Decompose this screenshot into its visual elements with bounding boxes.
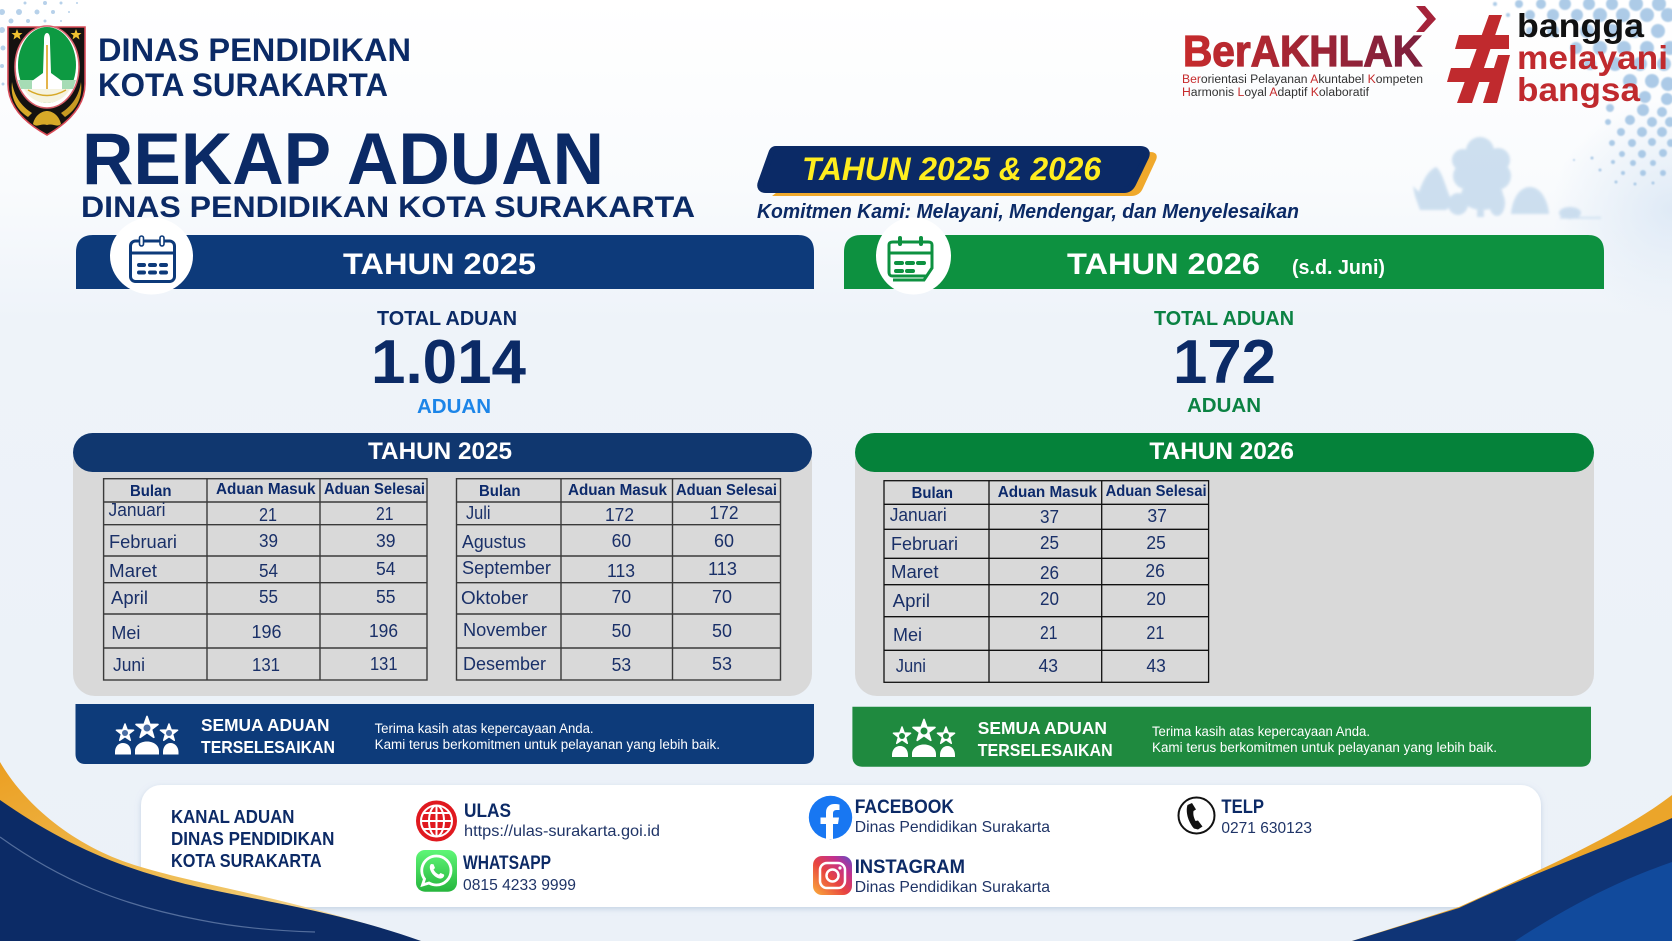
table: januari sampai juni 2025: Februari bbox=[109, 532, 177, 552]
banner: semua aduan terselesaikan 2026: Kami terus berkomitmen untuk pelayanan yang lebih baik. bbox=[1152, 740, 1497, 755]
channel: facebook: FACEBOOK bbox=[855, 797, 954, 818]
table: juli sampai desember 2025: 60 bbox=[714, 531, 734, 551]
table: juli sampai desember 2025: Desember bbox=[463, 654, 546, 674]
icon: people with stars green bbox=[892, 720, 955, 757]
heading: kanal aduan: KANAL ADUAN bbox=[171, 807, 294, 827]
table: januari sampai juni 2025: 55 bbox=[376, 587, 396, 607]
table: juli sampai desember 2025: 50 bbox=[612, 621, 631, 641]
table: juli sampai desember 2025: November bbox=[463, 620, 547, 640]
table: juli sampai desember 2025: Aduan Selesai bbox=[676, 482, 777, 499]
table: juli sampai desember 2025: 70 bbox=[712, 587, 732, 607]
table: januari sampai juni 2026: Aduan Selesai bbox=[1106, 483, 1207, 500]
banner: semua aduan terselesaikan 2025: Terima kasih atas kepercayaan Anda. bbox=[375, 721, 594, 736]
table: januari sampai juni 2025: Maret bbox=[109, 561, 157, 581]
banner: semua aduan terselesaikan 2025 bbox=[76, 704, 814, 764]
table: januari sampai juni 2025: 196 bbox=[369, 621, 398, 641]
table: januari sampai juni 2025: 54 bbox=[259, 561, 278, 581]
logo: #bangga melayani bangsa: melayani bbox=[1517, 39, 1668, 76]
banner: semua aduan terselesaikan 2026 bbox=[852, 707, 1591, 767]
table: juli sampai desember 2025: Juli bbox=[466, 503, 490, 523]
table: januari sampai juni 2026: 21 bbox=[1146, 623, 1164, 643]
channel: telepon: 0271 630123 bbox=[1221, 820, 1312, 837]
table: januari sampai juni 2026: 20 bbox=[1146, 589, 1166, 609]
channel: instagram bbox=[855, 857, 1050, 896]
channel: ulas: ULAS bbox=[464, 801, 511, 822]
title: REKAP ADUAN bbox=[82, 119, 604, 200]
table: juli sampai desember 2025: 60 bbox=[612, 531, 631, 551]
section bar: tahun 2026: (s.d. Juni) bbox=[1292, 257, 1385, 279]
table: januari sampai juni 2026: Bulan bbox=[912, 485, 953, 502]
table: januari sampai juni 2025: 39 bbox=[376, 531, 396, 551]
stat: total aduan 2026: ADUAN bbox=[1187, 395, 1261, 417]
table: januari sampai juni 2025: 21 bbox=[376, 504, 394, 524]
table: juli sampai desember 2025: 113 bbox=[708, 559, 737, 579]
table: januari sampai juni 2026: Juni bbox=[896, 656, 926, 676]
table: juli sampai desember 2025: 53 bbox=[712, 654, 732, 674]
banner: semua aduan terselesaikan 2025: SEMUA ADUAN bbox=[201, 715, 330, 735]
table: januari sampai juni 2026: 26 bbox=[1040, 563, 1059, 583]
table: juli sampai desember 2025: Agustus bbox=[462, 532, 526, 552]
table: januari sampai juni 2025: April bbox=[111, 588, 148, 608]
channel: telepon: TELP bbox=[1221, 797, 1264, 818]
channel: instagram: INSTAGRAM bbox=[855, 857, 965, 878]
table: juli sampai desember 2025: Oktober bbox=[461, 588, 528, 608]
channel: whatsapp: 0815 4233 9999 bbox=[463, 877, 576, 894]
header: agency name bbox=[98, 32, 411, 103]
table: januari sampai juni 2025: Mei bbox=[111, 623, 140, 643]
icon: instagram bbox=[813, 856, 852, 895]
stat: total aduan 2025: TOTAL ADUAN bbox=[377, 308, 517, 330]
table: januari sampai juni 2025: Aduan Masuk bbox=[216, 481, 316, 498]
table: januari sampai juni 2025: 196 bbox=[252, 622, 282, 642]
table: januari sampai juni 2026: 26 bbox=[1145, 561, 1165, 581]
stat: total aduan 2025 bbox=[371, 308, 527, 418]
table: juli sampai desember 2025: September bbox=[462, 558, 551, 578]
table: juli sampai desember 2025: Aduan Masuk bbox=[568, 482, 667, 499]
panel: kanal aduan bbox=[141, 785, 1541, 907]
logo: #bangga melayani bangsa bbox=[1447, 7, 1668, 108]
panel: tabel 2025 bbox=[73, 433, 812, 696]
stat: total aduan 2026: TOTAL ADUAN bbox=[1154, 308, 1294, 330]
logo: BerAKHLAK: Berorientasi Pelayanan Akuntabel Kompeten bbox=[1182, 74, 1423, 86]
channel: whatsapp: WHATSAPP bbox=[463, 853, 551, 874]
table: januari sampai juni 2026: 43 bbox=[1146, 656, 1166, 676]
header: agency name: DINAS PENDIDIKAN bbox=[98, 32, 411, 68]
channel: ulas bbox=[464, 801, 660, 840]
icon: calendar 2026 bbox=[876, 218, 951, 294]
table: juli sampai desember 2025: 50 bbox=[712, 621, 732, 641]
badge: tahun 2025 & 2026: TAHUN 2025 & 2026 bbox=[802, 151, 1101, 187]
icon: globe bbox=[416, 800, 457, 842]
stat: total aduan 2026 bbox=[1154, 308, 1294, 417]
heading: kanal aduan bbox=[171, 807, 334, 871]
stat: total aduan 2025: ADUAN bbox=[417, 396, 491, 418]
logo: BerAKHLAK bbox=[1182, 6, 1436, 99]
section bar: tahun 2025 bbox=[76, 218, 814, 294]
stat: total aduan 2026: 172 bbox=[1173, 328, 1276, 397]
icon: whatsapp bbox=[416, 850, 457, 892]
channel: facebook bbox=[855, 797, 1050, 836]
table: januari sampai juni 2026: Maret bbox=[891, 562, 938, 582]
table: januari sampai juni 2026: 21 bbox=[1040, 623, 1058, 643]
bottom right swoosh bbox=[1352, 795, 1672, 941]
channel: ulas: https://ulas-surakarta.goi.id bbox=[464, 823, 660, 840]
table: juli sampai desember 2025: 172 bbox=[605, 505, 634, 525]
logo: BerAKHLAK: Harmonis Loyal Adaptif Kolaboratif bbox=[1182, 87, 1370, 99]
table: januari sampai juni 2026: 43 bbox=[1038, 656, 1058, 676]
channel: telepon bbox=[1221, 797, 1312, 837]
icon: facebook bbox=[809, 796, 852, 839]
halftone dots top right bbox=[1493, 0, 1672, 186]
banner: semua aduan terselesaikan 2025: TERSELESAIKAN bbox=[201, 737, 335, 757]
badge: tahun 2025 & 2026 bbox=[760, 149, 1157, 196]
table: januari sampai juni 2026: Januari bbox=[890, 505, 947, 525]
channel: instagram: Dinas Pendidikan Surakarta bbox=[855, 879, 1050, 896]
table: januari sampai juni 2026: Mei bbox=[893, 625, 922, 645]
halftone dots top left bbox=[0, 1, 78, 86]
table: juli sampai desember 2025: Bulan bbox=[479, 483, 520, 500]
table: januari sampai juni 2025: Aduan Selesai bbox=[324, 481, 425, 498]
tagline: Komitmen Kami: Melayani, Mendengar, dan Menyelesaikan bbox=[757, 201, 1299, 223]
logo: Kota Surakarta shield bbox=[8, 26, 85, 135]
table: januari sampai juni 2025: 54 bbox=[376, 559, 396, 579]
table: januari sampai juni 2026: April bbox=[893, 591, 930, 611]
table: januari sampai juni 2026: Februari bbox=[891, 534, 958, 554]
logo: #bangga melayani bangsa: bangga bbox=[1517, 7, 1645, 44]
banner: semua aduan terselesaikan 2026: Terima kasih atas kepercayaan Anda. bbox=[1152, 724, 1370, 739]
table: januari sampai juni 2026: Aduan Masuk bbox=[998, 484, 1097, 501]
table: januari sampai juni 2025: 131 bbox=[370, 654, 398, 674]
heading: kanal aduan: DINAS PENDIDIKAN bbox=[171, 829, 334, 849]
panel: tabel 2025: TAHUN 2025 bbox=[368, 438, 512, 465]
table: juli sampai desember 2025: 172 bbox=[710, 503, 738, 523]
panel: tabel 2026: TAHUN 2026 bbox=[1149, 438, 1294, 465]
panel: tabel 2026 bbox=[855, 433, 1594, 696]
icon: calendar 2025 bbox=[110, 218, 193, 294]
banner: semua aduan terselesaikan 2025: Kami terus berkomitmen untuk pelayanan yang lebih baik. bbox=[375, 737, 720, 752]
section bar: tahun 2025: TAHUN 2025 bbox=[343, 248, 536, 281]
channel: whatsapp bbox=[463, 853, 576, 894]
table: juli sampai desember 2025: 113 bbox=[607, 561, 635, 581]
table: januari sampai juni 2026 bbox=[884, 481, 1209, 682]
table: januari sampai juni 2026: 37 bbox=[1040, 507, 1059, 527]
section bar: tahun 2026 bbox=[844, 218, 1604, 294]
table: januari sampai juni 2025: Juni bbox=[113, 655, 145, 675]
table: januari sampai juni 2025 bbox=[104, 479, 427, 680]
icon: telephone bbox=[1178, 798, 1214, 834]
table: juli sampai desember 2025: 70 bbox=[612, 587, 631, 607]
table: januari sampai juni 2026: 37 bbox=[1147, 506, 1167, 526]
table: januari sampai juni 2025: 21 bbox=[259, 505, 277, 525]
table: juli sampai desember 2025: 53 bbox=[612, 655, 631, 675]
table: januari sampai juni 2025: 131 bbox=[252, 655, 280, 675]
icon: people with stars bbox=[115, 716, 178, 754]
channel: facebook: Dinas Pendidikan Surakarta bbox=[855, 819, 1050, 836]
heading: kanal aduan: KOTA SURAKARTA bbox=[171, 851, 322, 871]
banner: semua aduan terselesaikan 2026: SEMUA ADUAN bbox=[978, 718, 1107, 738]
table: juli sampai desember 2025 bbox=[456, 479, 780, 680]
table: januari sampai juni 2026: 20 bbox=[1040, 589, 1059, 609]
table: januari sampai juni 2025: Bulan bbox=[130, 483, 172, 500]
table: januari sampai juni 2026: 25 bbox=[1146, 533, 1166, 553]
logo: #bangga melayani bangsa: bangsa bbox=[1517, 71, 1641, 108]
banner: semua aduan terselesaikan 2026: TERSELESAIKAN bbox=[978, 740, 1113, 760]
stat: total aduan 2025: 1.014 bbox=[371, 328, 527, 397]
table: januari sampai juni 2026: 25 bbox=[1040, 533, 1059, 553]
table: januari sampai juni 2025: Januari bbox=[108, 500, 166, 520]
header: agency name: KOTA SURAKARTA bbox=[98, 67, 388, 103]
logo: BerAKHLAK: BerAKHLAK bbox=[1183, 27, 1422, 76]
title bbox=[81, 119, 695, 224]
table: januari sampai juni 2025: 55 bbox=[259, 587, 278, 607]
table: januari sampai juni 2025: 39 bbox=[259, 531, 278, 551]
bottom left swoosh bbox=[0, 762, 421, 941]
title: DINAS PENDIDIKAN KOTA SURAKARTA bbox=[81, 191, 695, 224]
section bar: tahun 2026: TAHUN 2026 bbox=[1067, 248, 1260, 281]
decorative trees bbox=[1413, 137, 1601, 219]
